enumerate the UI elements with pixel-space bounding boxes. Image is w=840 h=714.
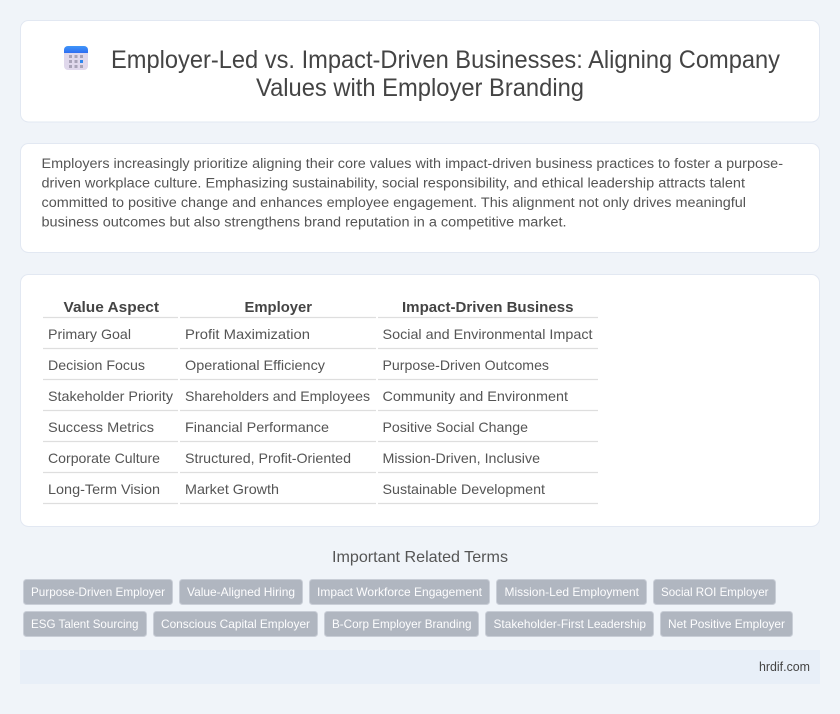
footer	[20, 650, 820, 684]
tag	[486, 612, 654, 636]
table row: long-term vision	[48, 481, 545, 497]
table row: success metrics: Success Metrics	[48, 419, 154, 435]
panel: title card	[20, 20, 820, 122]
table row: primary goal: Primary Goal	[48, 326, 131, 342]
table row: decision focus: Decision Focus	[48, 357, 145, 373]
table row: stakeholder priority	[48, 388, 568, 404]
tag: Purpose-Driven Employer	[31, 585, 165, 599]
heading: important related terms: Important Related Terms	[332, 549, 508, 566]
footer source: hrdif.com	[759, 660, 810, 674]
panel: comparison table	[20, 274, 820, 526]
tag: Net Positive Employer	[668, 617, 785, 631]
tag	[310, 580, 490, 604]
table row: success metrics: Financial Performance	[185, 419, 329, 435]
tag	[324, 612, 478, 636]
table row: corporate culture: Corporate Culture	[48, 450, 160, 466]
icon: calendar	[64, 46, 88, 70]
table row: primary goal: Profit Maximization	[185, 326, 310, 342]
text block: introduction paragraph: committed to positive change and enhances employee engagement. This alignment not only drives meaningful	[42, 195, 746, 211]
table row: corporate culture: Mission-Driven, Inclusive	[382, 450, 540, 466]
heading: Employer-Led vs. Impact-Driven Businesses: Aligning Company	[111, 46, 780, 74]
tag	[154, 612, 318, 636]
tag	[496, 580, 646, 604]
table row: decision focus: Operational Efficiency	[185, 357, 325, 373]
tag list	[24, 580, 792, 636]
tag	[660, 612, 792, 636]
tag: Stakeholder-First Leadership	[494, 617, 646, 631]
table row: stakeholder priority: Shareholders and Employees	[185, 388, 370, 404]
text block: introduction paragraph	[42, 156, 783, 230]
table header: Impact-Driven Business	[402, 299, 574, 316]
tag: ESG Talent Sourcing	[31, 617, 138, 631]
table row: corporate culture	[48, 450, 540, 466]
table row: primary goal	[48, 326, 593, 342]
table row: decision focus: Purpose-Driven Outcomes	[382, 357, 549, 373]
table row: stakeholder priority: Stakeholder Priority	[48, 388, 173, 404]
table row: corporate culture: Structured, Profit-Oriented	[185, 450, 351, 466]
table header: Employer	[244, 299, 312, 316]
table header	[64, 299, 574, 316]
table row: success metrics: Positive Social Change	[382, 419, 528, 435]
tag: Conscious Capital Employer	[161, 617, 310, 631]
tag: Impact Workforce Engagement	[317, 585, 483, 599]
table row: primary goal: Social and Environmental Impact	[382, 326, 593, 342]
tag: B-Corp Employer Branding	[332, 617, 472, 631]
tag	[24, 580, 172, 604]
table row: stakeholder priority: Community and Environment	[382, 388, 568, 404]
tag: Value-Aligned Hiring	[187, 585, 295, 599]
tag	[180, 580, 302, 604]
text block: introduction paragraph: business outcomes but also strengthens brand reputation in a competitive market.	[42, 214, 566, 230]
panel: introduction	[20, 144, 820, 252]
tag: Social ROI Employer	[661, 585, 768, 599]
tag	[654, 580, 776, 604]
text block: introduction paragraph: driven workplace culture. Emphasizing sustainability, social responsibility, and ethical leadership attracts talent	[42, 176, 745, 192]
heading: Values with Employer Branding	[256, 74, 584, 102]
table header: Value Aspect	[64, 299, 159, 316]
table row: long-term vision: Long-Term Vision	[48, 481, 160, 497]
table row: success metrics	[48, 419, 528, 435]
heading	[111, 46, 780, 102]
table row: long-term vision: Sustainable Development	[382, 481, 545, 497]
table row: long-term vision: Market Growth	[185, 481, 279, 497]
tag	[24, 612, 146, 636]
table row: decision focus	[48, 357, 549, 373]
tag: Mission-Led Employment	[504, 585, 640, 599]
text block: introduction paragraph: Employers increasingly prioritize aligning their core values with impact-driven business practices to foster a purpose-	[42, 156, 783, 172]
